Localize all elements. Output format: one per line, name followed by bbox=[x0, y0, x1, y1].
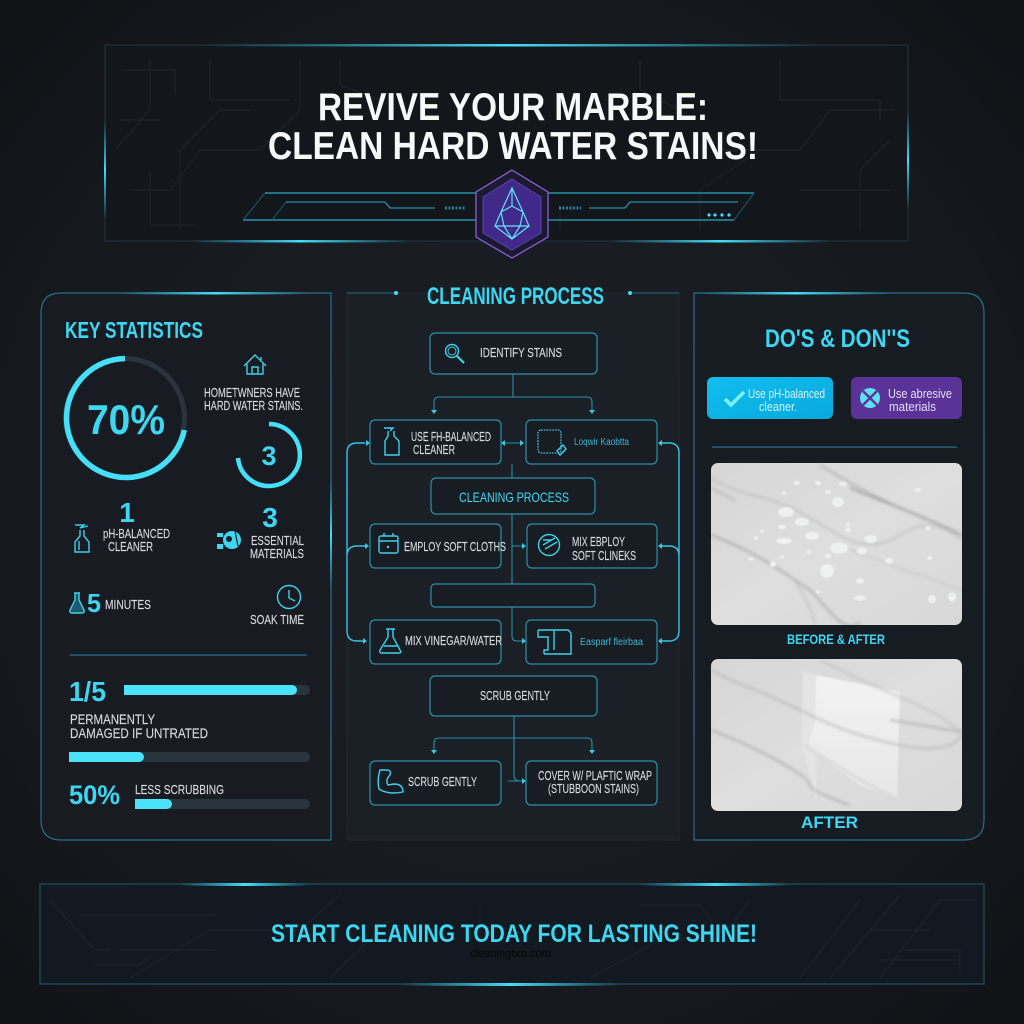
don't button bbox=[851, 377, 962, 419]
title: CLEAN HARD WATER STAINS! bbox=[268, 125, 758, 168]
title bbox=[268, 86, 758, 168]
stat: 5 minutes: MINUTES bbox=[105, 597, 151, 612]
progress: 50% less scrubbing: LESS SCRUBBING bbox=[135, 782, 224, 797]
ring stat: 3 bbox=[238, 424, 300, 486]
step: cleaning process: CLEANING PROCESS bbox=[459, 489, 569, 505]
stat: 1 ph-balanced cleaner: CLEANER bbox=[108, 539, 153, 554]
step: easy part bbox=[526, 620, 657, 664]
caption: after: AFTER bbox=[801, 813, 858, 832]
image: marble before bbox=[711, 463, 962, 626]
heading: do's and don'ts: DO'S & DON''S bbox=[765, 325, 910, 353]
ring stat: 3: 3 bbox=[261, 441, 277, 471]
do button bbox=[707, 377, 833, 419]
text: homeowners bbox=[204, 385, 303, 413]
stat: 1 ph-balanced cleaner bbox=[75, 497, 170, 554]
donut chart: 70%: 70% bbox=[87, 396, 165, 443]
title: REVIVE YOUR MARBLE: bbox=[318, 86, 708, 129]
stat: 3 essential materials bbox=[217, 502, 304, 561]
step: mix employ bbox=[527, 524, 657, 568]
step: employ soft cloths: EMPLOY SOFT CLOTHS bbox=[404, 539, 506, 554]
text: permanently damaged bbox=[70, 711, 208, 741]
progress: 1/5: 1/5 bbox=[69, 676, 106, 707]
step: scrub gently with arm icon: SCRUB GENTLY bbox=[408, 774, 477, 789]
step: mix employ: SOFT CLINEKS bbox=[572, 548, 636, 563]
donut chart: 70% bbox=[66, 358, 184, 478]
progress: 50% less scrubbing: 50% bbox=[69, 780, 120, 810]
heading: key statistics: KEY STATISTICS bbox=[65, 317, 203, 343]
step: use ph-balanced cleaner: USE FH-BALANCED bbox=[411, 429, 491, 444]
stat: 3 essential materials: ESSENTIAL bbox=[251, 533, 304, 548]
step: scrub gently bbox=[430, 676, 597, 716]
step: empty bbox=[431, 584, 595, 607]
step: mix employ: MIX EBPLOY bbox=[572, 534, 625, 549]
step: use ph-balanced cleaner: CLEANER bbox=[413, 442, 455, 457]
footer banner bbox=[40, 883, 984, 986]
heading: cleaning process: CLEANING PROCESS bbox=[427, 283, 604, 310]
call to action: START CLEANING TODAY FOR LASTING SHINE! bbox=[271, 920, 757, 948]
step: cloth: Loqwir Kaobtta bbox=[574, 437, 629, 448]
step: easy part: Easparf fleirbaa bbox=[580, 637, 643, 648]
stat: 3 essential materials: MATERIALS bbox=[250, 546, 304, 561]
do button: cleaner. bbox=[759, 399, 797, 414]
panel: dos and donts bbox=[694, 292, 984, 840]
stat: 5 minutes: 5 bbox=[87, 588, 101, 618]
step: scrub gently: SCRUB GENTLY bbox=[480, 688, 550, 703]
header banner bbox=[104, 44, 909, 258]
step: use ph-balanced cleaner bbox=[370, 420, 501, 464]
step: mix vinegar: MIX VINEGAR/WATER bbox=[405, 633, 502, 648]
text: homeowners: HOMETWNERS HAVE bbox=[204, 385, 300, 400]
image: marble after bbox=[711, 659, 962, 811]
header glow accents bbox=[104, 44, 909, 242]
stat: 1 ph-balanced cleaner: pH-BALANCED bbox=[103, 526, 170, 541]
text: homeowners: HARD WATER STAINS. bbox=[204, 398, 303, 413]
text: permanently damaged: PERMANENTLY bbox=[70, 711, 156, 727]
step: cloth bbox=[526, 420, 657, 464]
stat: 5 minutes bbox=[70, 588, 151, 618]
icon: crystal hexagon badge bbox=[476, 170, 548, 258]
step: cover with plastic wrap: COVER W/ PLAFTIC WRAP bbox=[538, 768, 652, 783]
step: mix vinegar bbox=[370, 620, 502, 664]
stat: 1 ph-balanced cleaner: 1 bbox=[119, 497, 135, 528]
step: identify stains bbox=[430, 333, 597, 374]
step: employ soft cloths bbox=[370, 524, 506, 568]
footer glow accents bbox=[180, 883, 790, 986]
hud lines bbox=[243, 193, 754, 220]
panel: cleaning process bbox=[347, 283, 679, 840]
connectors bbox=[347, 374, 679, 784]
watermark: cleaningbro.com bbox=[470, 948, 551, 960]
icon: house bbox=[244, 355, 266, 374]
progress: 1/5 bbox=[69, 676, 310, 707]
stat: soak time bbox=[250, 586, 304, 627]
caption: before and after: BEFORE & AFTER bbox=[787, 631, 885, 647]
progress: 50% less scrubbing bbox=[69, 780, 310, 810]
don't button: Use abresive bbox=[888, 386, 952, 401]
don't button: materials bbox=[889, 399, 936, 414]
panel: key statistics bbox=[41, 292, 332, 840]
progress: damaged bbox=[69, 752, 310, 762]
step: cover with plastic wrap: (STUBBOON STAINS) bbox=[548, 781, 639, 796]
do button: Use pH-balanced bbox=[748, 386, 825, 401]
stat: soak time: SOAK TIME bbox=[250, 612, 304, 627]
text: permanently damaged: DAMAGED IF UNTRATED bbox=[70, 725, 208, 741]
step: identify stains: IDENTIFY STAINS bbox=[480, 345, 562, 360]
step: scrub gently with arm icon bbox=[370, 761, 501, 805]
stat: 3 essential materials: 3 bbox=[262, 502, 278, 533]
step: cleaning process bbox=[431, 478, 595, 514]
step: cover with plastic wrap bbox=[526, 761, 657, 805]
